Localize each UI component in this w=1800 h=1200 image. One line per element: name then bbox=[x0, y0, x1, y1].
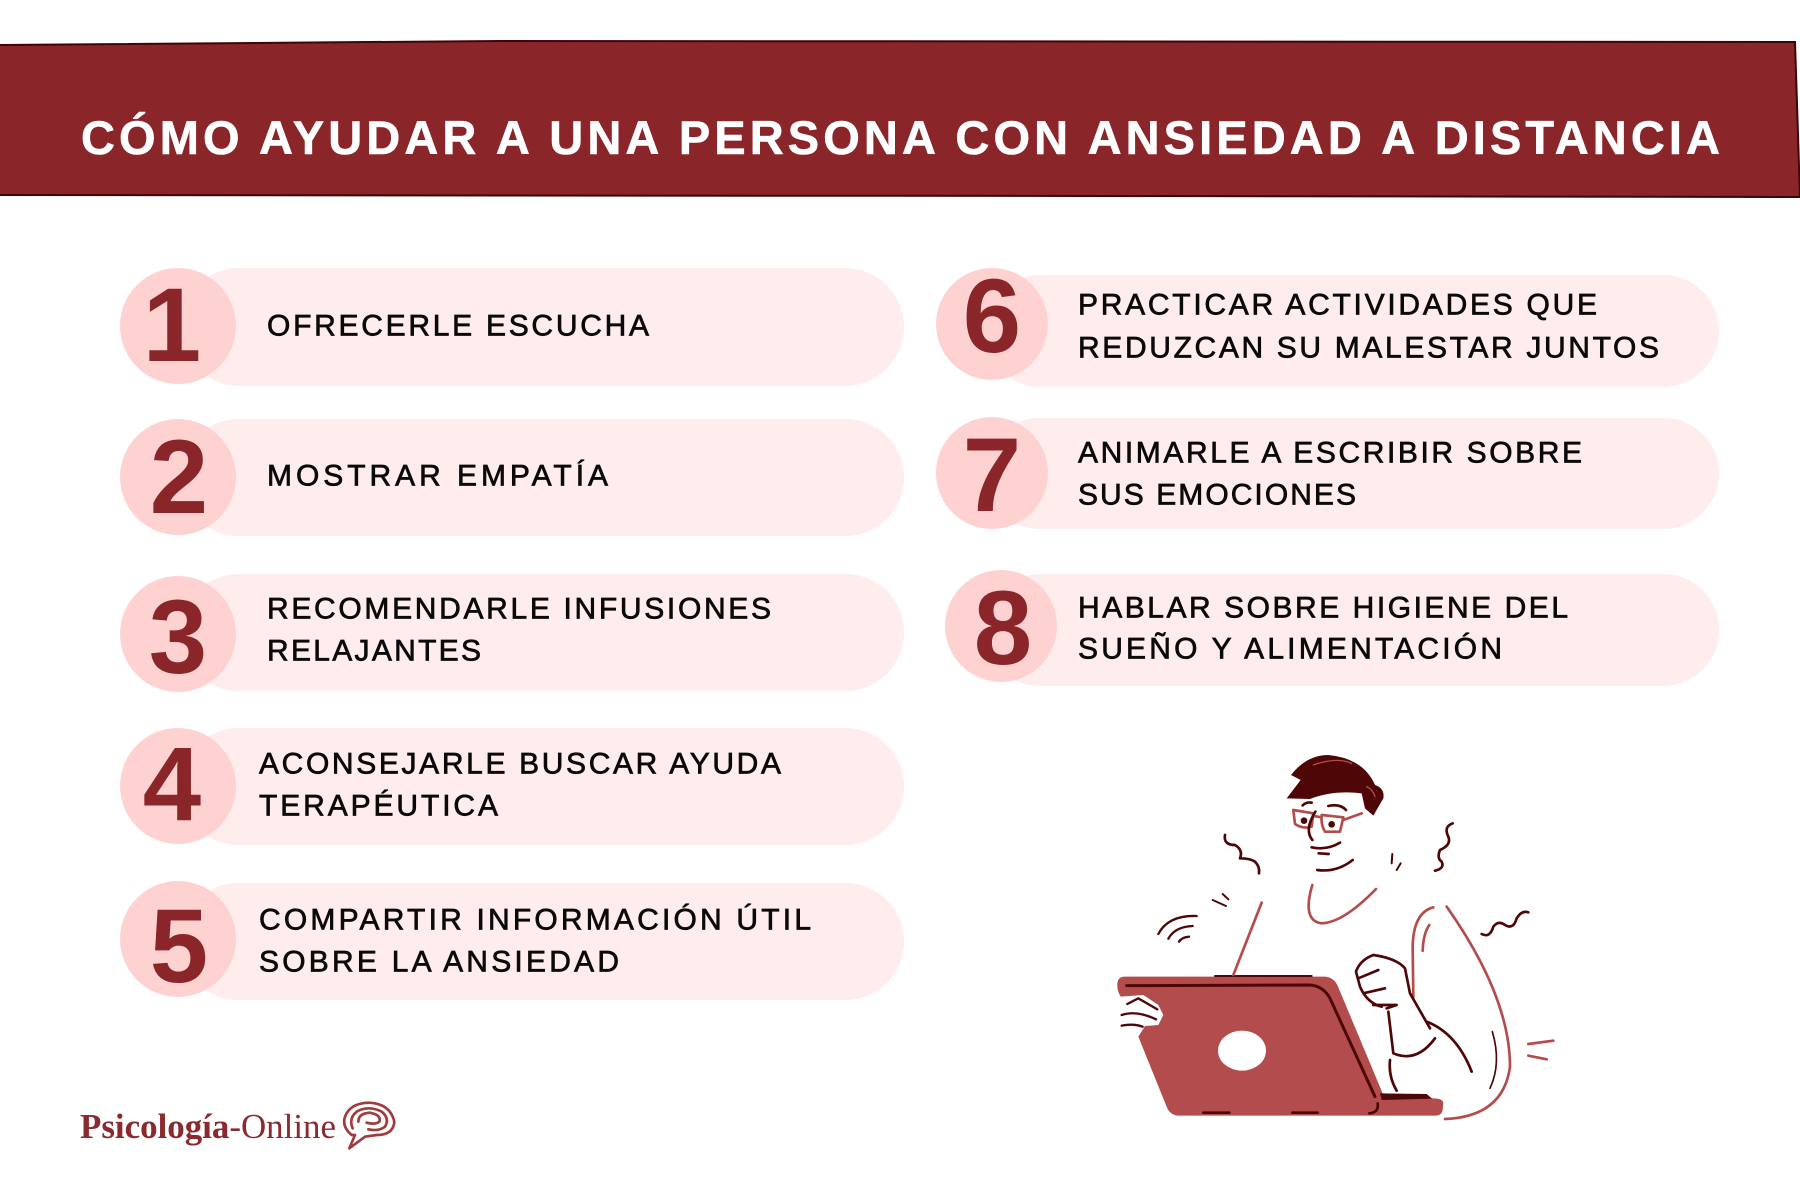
icon: face and glasses bbox=[1293, 802, 1362, 870]
item 4 bbox=[120, 726, 904, 845]
item 5: 5 bbox=[150, 888, 208, 1005]
title banner bbox=[0, 41, 1800, 197]
item 5: SOBRE LA ANSIEDAD bbox=[259, 946, 619, 978]
item 2: MOSTRAR EMPATÍA bbox=[267, 460, 608, 492]
icon: fist and arm bbox=[1356, 955, 1472, 1091]
item 2: 2 bbox=[150, 419, 208, 536]
icon: anxiety squiggles and ticks bbox=[1158, 823, 1553, 1059]
item 8: SUEÑO Y ALIMENTACIÓN bbox=[1078, 632, 1502, 666]
item 7: ANIMARLE A ESCRIBIR SOBRE bbox=[1078, 436, 1582, 470]
title: CÓMO AYUDAR A UNA PERSONA CON ANSIEDAD A DISTANCIA bbox=[81, 111, 1720, 164]
item 5: COMPARTIR INFORMACIÓN ÚTIL bbox=[259, 904, 811, 936]
item 2 bbox=[120, 419, 904, 536]
icon: torso outline bbox=[1233, 885, 1510, 1119]
item 4: 4 bbox=[143, 726, 201, 843]
item 3: 3 bbox=[149, 579, 207, 696]
icon: hair bbox=[1287, 755, 1384, 816]
item 1: 1 bbox=[143, 267, 201, 384]
item 7: SUS EMOCIONES bbox=[1078, 478, 1356, 512]
item 6: REDUZCAN SU MALESTAR JUNTOS bbox=[1078, 332, 1659, 364]
logo: Psicología-Online bbox=[80, 1103, 394, 1148]
icon: laptop bbox=[1117, 976, 1443, 1116]
item 6: 6 bbox=[963, 258, 1021, 375]
item 6: PRACTICAR ACTIVIDADES QUE bbox=[1078, 288, 1597, 322]
illustration: anxious person at laptop bbox=[1117, 755, 1553, 1119]
item 3: RELAJANTES bbox=[267, 634, 481, 668]
item 1 bbox=[120, 267, 904, 386]
item 8: HABLAR SOBRE HIGIENE DEL bbox=[1078, 592, 1568, 624]
item 5 bbox=[120, 881, 904, 1005]
item 7 bbox=[936, 417, 1719, 534]
item 1: OFRECERLE ESCUCHA bbox=[267, 310, 649, 342]
item 8 bbox=[945, 570, 1719, 687]
item 4: TERAPÉUTICA bbox=[259, 790, 498, 822]
icon: left hand bbox=[1122, 998, 1157, 1027]
item 6 bbox=[936, 258, 1719, 387]
item 3: RECOMENDARLE INFUSIONES bbox=[267, 592, 771, 626]
icon: brain speech bubble bbox=[344, 1103, 394, 1148]
item 3 bbox=[120, 574, 904, 696]
item 7: 7 bbox=[963, 417, 1021, 534]
item 4: ACONSEJARLE BUSCAR AYUDA bbox=[259, 748, 781, 780]
logo: Psicología-Online: Psicología-Online bbox=[80, 1107, 336, 1146]
item 8: 8 bbox=[974, 570, 1032, 687]
